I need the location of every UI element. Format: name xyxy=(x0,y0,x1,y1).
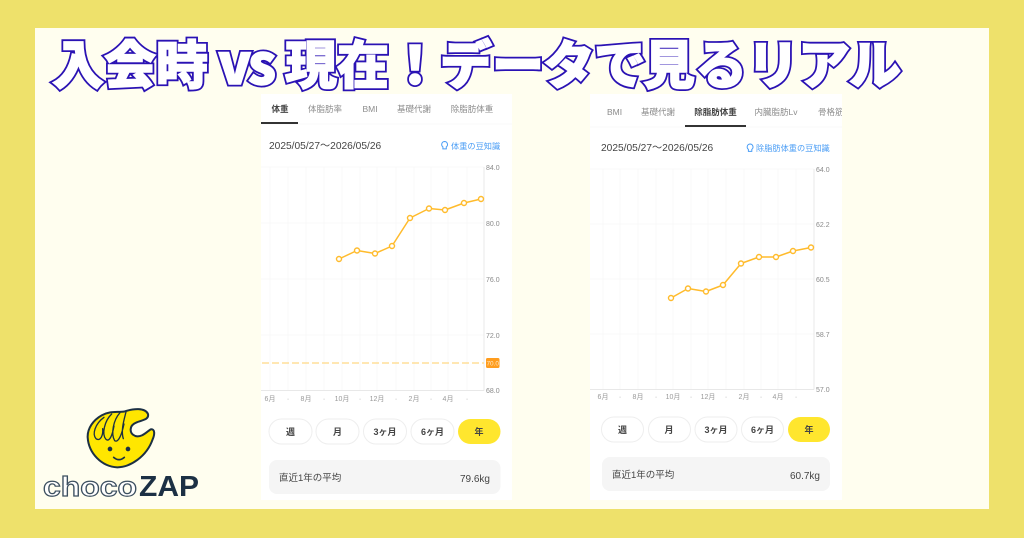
wordmark: choco: choco xyxy=(43,471,137,502)
line chart: lean body mass: 2月 xyxy=(739,393,749,401)
tab bar: body weight: 除脂肪体重 xyxy=(451,104,494,114)
logo: chocoZAP xyxy=(43,409,199,503)
line chart: lean body mass: 10月 xyxy=(666,393,680,401)
line chart: body weight: 70.0 xyxy=(486,360,499,368)
wordmark: ZAP: ZAP xyxy=(139,471,199,503)
tab bar: lean body mass: BMI xyxy=(607,107,622,117)
period buttons: 3ヶ月 xyxy=(373,427,397,437)
date range: 2025/05/27～2026/05/26 xyxy=(269,141,381,152)
icon: yellow hand mascot xyxy=(88,409,154,467)
average summary box: 直近1年の平均 xyxy=(279,472,341,484)
line chart: lean body mass: 8月 xyxy=(633,393,643,401)
line chart: lean body mass: · xyxy=(619,394,621,401)
line chart: body weight: · xyxy=(430,396,432,403)
tab bar: body weight: 基礎代謝 xyxy=(397,104,431,114)
average summary box: 60.7kg xyxy=(790,471,820,482)
line chart: lean body mass: 4月 xyxy=(773,393,783,401)
tab bar: lean body mass xyxy=(590,107,853,127)
line chart: body weight: 72.0 xyxy=(486,333,500,340)
line chart: lean body mass: 57.0 xyxy=(816,387,830,394)
tab bar: body weight: 体脂肪率 xyxy=(308,104,342,114)
line chart: body weight: · xyxy=(287,396,289,403)
title: 入会時 xyxy=(52,24,208,99)
period buttons xyxy=(602,417,830,442)
hint link: body weight tips: 体重の豆知識 xyxy=(451,141,500,151)
average summary box: 直近1年の平均 xyxy=(612,469,674,481)
tab bar: lean body mass: 内臓脂肪Lv xyxy=(755,107,798,117)
line chart: lean body mass: 64.0 xyxy=(816,167,830,174)
period buttons: 6ヶ月 xyxy=(751,425,774,435)
title: 入会時 xyxy=(52,24,208,99)
period buttons: 6ヶ月 xyxy=(421,427,444,437)
line chart: body weight: · xyxy=(359,396,361,403)
tab bar: lean body mass: 骨格筋率 xyxy=(818,107,853,117)
line chart: body weight: 12月 xyxy=(370,395,384,403)
title: vs xyxy=(218,20,276,100)
line chart: body weight xyxy=(261,165,500,403)
line chart: body weight: 2月 xyxy=(409,395,419,403)
line chart: lean body mass: 62.2 xyxy=(816,222,830,229)
panel: left app screenshot, body weight xyxy=(261,94,512,500)
title xyxy=(52,20,901,100)
period buttons: 3ヶ月 xyxy=(704,425,728,435)
tab bar: lean body mass: 除脂肪体重 xyxy=(694,107,737,117)
tab bar: body weight xyxy=(261,104,512,124)
line chart: body weight: 8月 xyxy=(301,395,311,403)
average summary box xyxy=(602,457,830,491)
line chart: body weight: 4月 xyxy=(443,395,453,403)
period buttons: 年 xyxy=(474,426,484,437)
line chart: body weight: · xyxy=(466,396,468,403)
line chart: body weight: 68.0 xyxy=(486,388,500,395)
hint link: lean body mass tips: 除脂肪体重の豆知識 xyxy=(756,143,830,153)
line chart: body weight: · xyxy=(323,396,325,403)
line chart: lean body mass: · xyxy=(725,394,727,401)
average summary box: 79.6kg xyxy=(460,474,490,485)
line chart: lean body mass: 58.7 xyxy=(816,332,830,339)
line chart: body weight: · xyxy=(395,396,397,403)
line chart: body weight: 76.0 xyxy=(486,277,500,284)
panel: right app screenshot, lean body mass xyxy=(590,94,853,500)
line chart: lean body mass: · xyxy=(795,394,797,401)
line chart: body weight: 84.0 xyxy=(486,165,500,172)
title: vs xyxy=(218,20,276,100)
period buttons: 週 xyxy=(618,425,627,435)
period buttons: 年 xyxy=(804,424,814,435)
line chart: body weight: 80.0 xyxy=(486,221,500,228)
tab bar: body weight: 体重 xyxy=(271,104,289,114)
line chart: lean body mass: · xyxy=(655,394,657,401)
line chart: lean body mass xyxy=(590,167,830,401)
period buttons: 週 xyxy=(286,427,295,437)
date range: 2025/05/27～2026/05/26 xyxy=(601,143,713,154)
tab bar: lean body mass: 基礎代謝 xyxy=(641,107,675,117)
title: 現在！データで見るリアル xyxy=(285,24,901,99)
line chart: lean body mass: 6月 xyxy=(598,393,608,401)
average summary box xyxy=(269,460,500,494)
period buttons xyxy=(269,419,500,444)
line chart: body weight: 10月 xyxy=(335,395,349,403)
period buttons: 月 xyxy=(333,427,342,437)
line chart: lean body mass: · xyxy=(760,394,762,401)
line chart: lean body mass: · xyxy=(690,394,692,401)
line chart: lean body mass: 60.5 xyxy=(816,277,830,284)
line chart: body weight: 6月 xyxy=(265,395,275,403)
period buttons: 月 xyxy=(664,425,674,435)
title: 現在！データで見るリアル xyxy=(285,24,901,99)
tab bar: body weight: BMI xyxy=(362,104,378,114)
line chart: lean body mass: 12月 xyxy=(701,393,715,401)
